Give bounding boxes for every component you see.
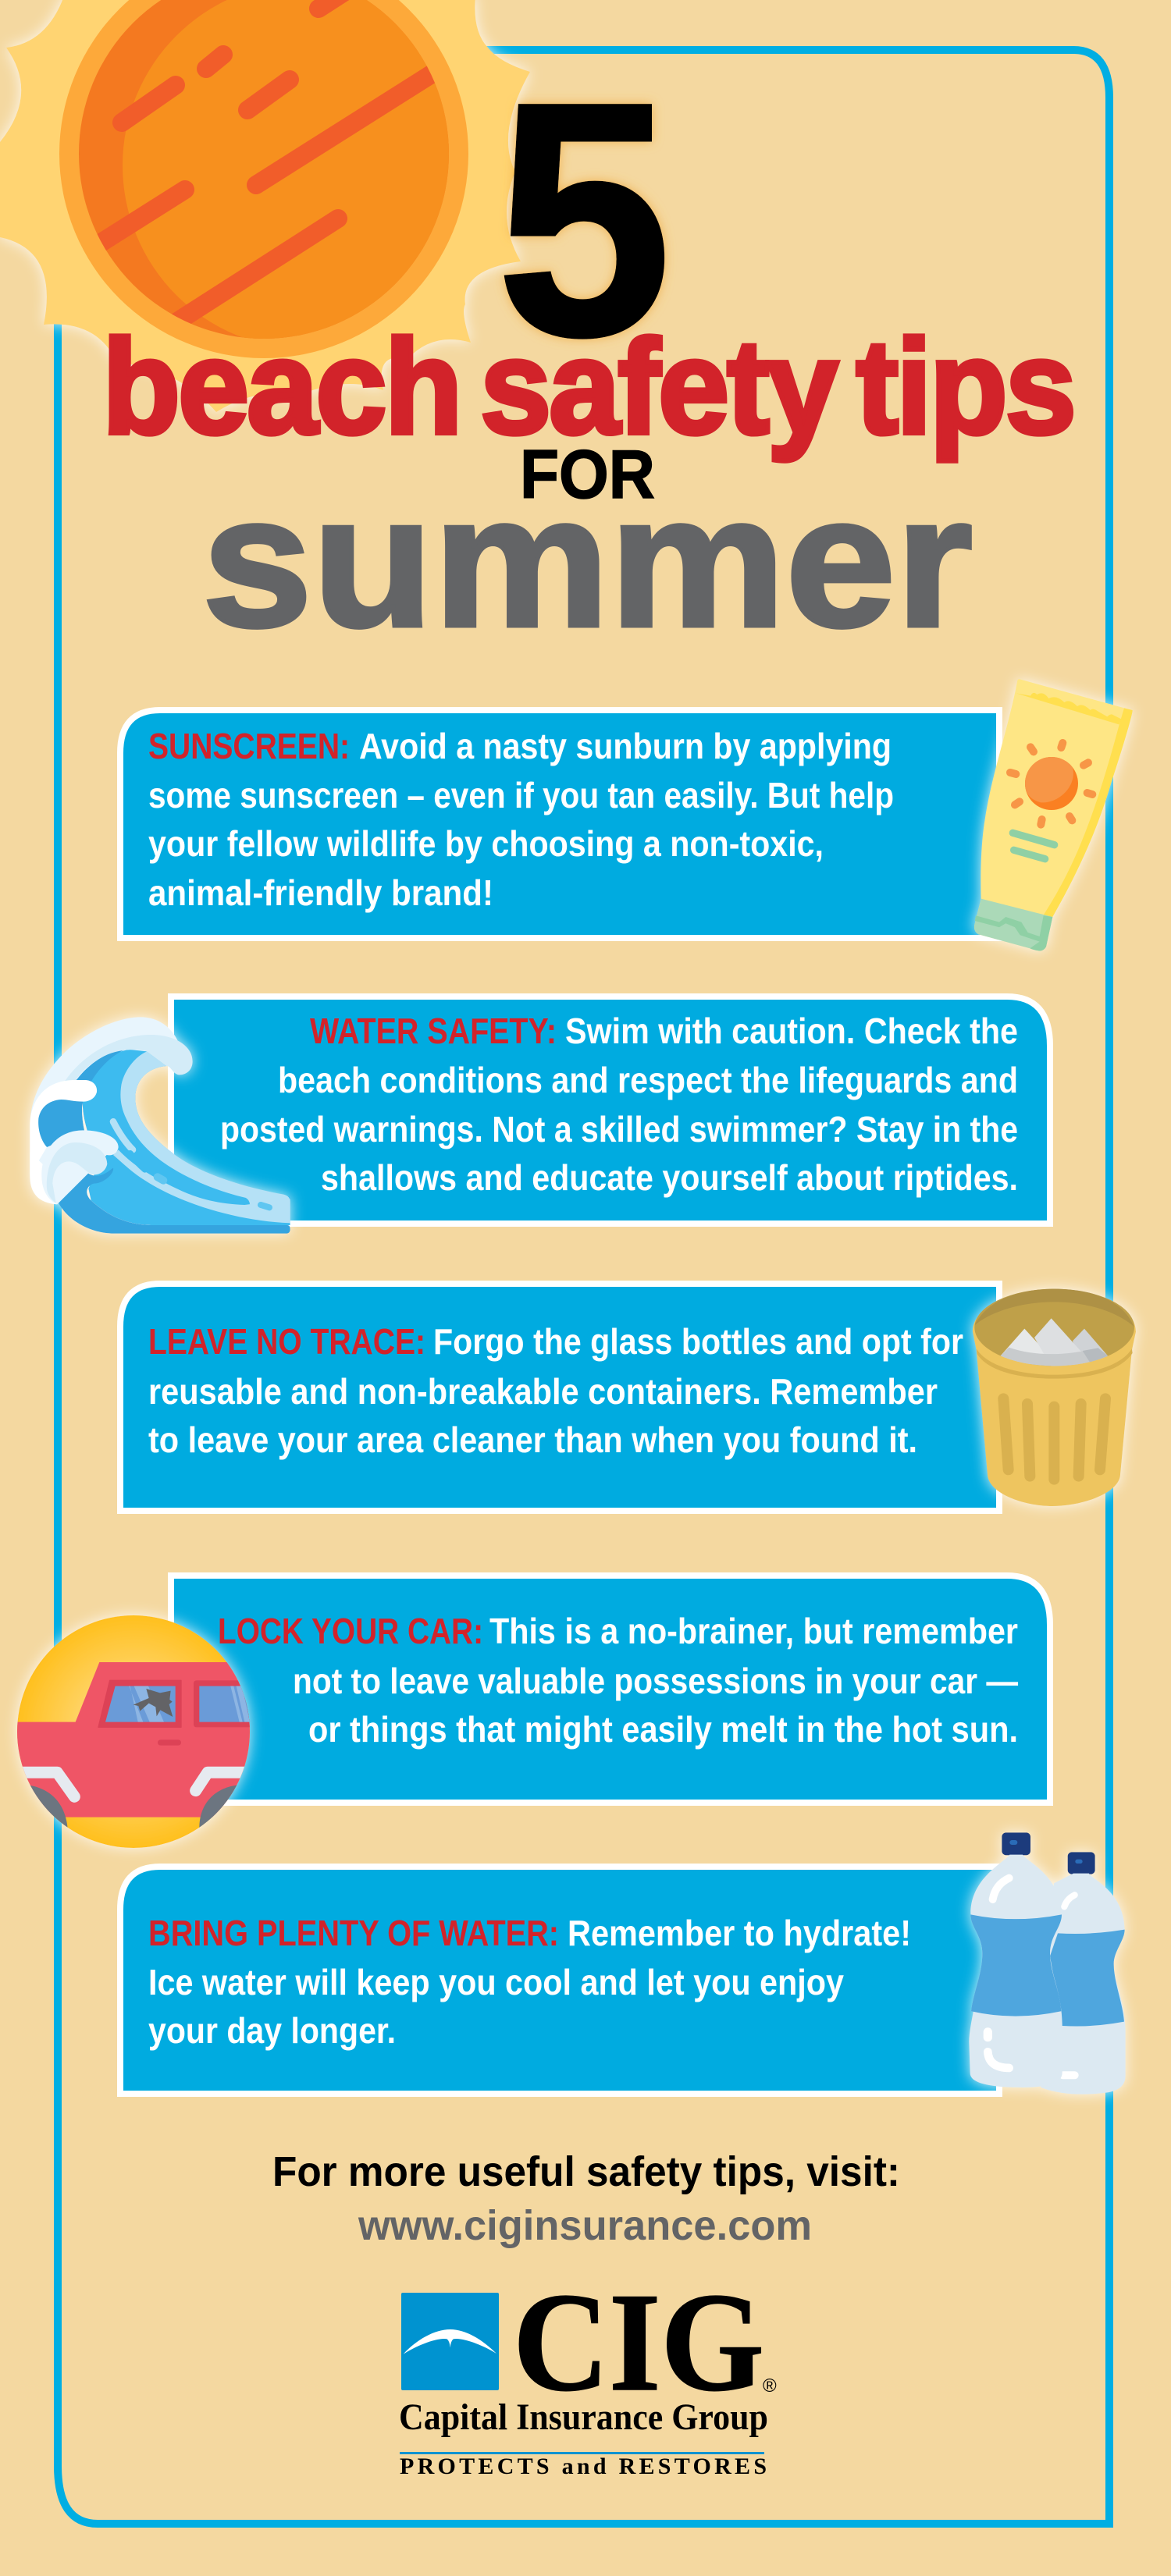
panel text: BRING PLENTY OF WATER:	[148, 1913, 559, 1953]
title: FOR: FOR	[520, 435, 655, 513]
company name: Capital Insurance Group	[399, 2397, 768, 2438]
panel text: Remember to hydrate!	[568, 1913, 911, 1953]
panel text	[148, 1913, 911, 2051]
panel background	[120, 1867, 999, 2094]
title: number 5: 5	[497, 34, 671, 405]
panel text: Ice water will keep you cool and let you enjoy	[148, 1962, 844, 2002]
tagline: PROTECTS and RESTORES	[400, 2453, 767, 2479]
panel text: LEAVE NO TRACE:	[148, 1321, 425, 1362]
logo mark	[401, 2293, 499, 2390]
panel text	[148, 726, 894, 913]
icon: sunscreen tube	[974, 679, 1133, 950]
panel text: beach conditions and respect the lifeguards and	[278, 1060, 1018, 1100]
panel text: Avoid a nasty sunburn by applying	[359, 726, 892, 766]
panel text: your day longer.	[148, 2010, 396, 2051]
panel text: not to leave valuable possessions in your car —	[293, 1661, 1018, 1701]
title: summer: summer	[202, 457, 973, 666]
sun disc	[79, 0, 449, 339]
logo wordmark: CIG	[513, 2265, 764, 2421]
sun halo	[0, 0, 530, 412]
panel text: animal-friendly brand!	[148, 872, 493, 913]
panel text	[293, 1611, 1018, 1750]
sun outer ring	[59, 0, 468, 358]
panel text: WATER SAFETY:	[310, 1011, 557, 1051]
panel: lock your car	[171, 1576, 1050, 1803]
panel background	[171, 1576, 1050, 1803]
icon: water bottles	[969, 1832, 1126, 2095]
panel background	[120, 1284, 999, 1511]
panel: sunscreen	[120, 710, 999, 938]
footer: call to action: For more useful safety tips, visit:	[272, 2148, 900, 2195]
panel text: shallows and educate yourself about riptides.	[321, 1157, 1018, 1198]
panel background	[120, 710, 999, 938]
registered mark: ®	[763, 2375, 777, 2397]
panel text: Swim with caution. Check the	[565, 1011, 1018, 1051]
logo: CIG	[399, 2265, 777, 2479]
title: beach safety tips: beach safety tips	[102, 312, 1074, 462]
icon: wave	[30, 1017, 290, 1234]
panel text: your fellow wildlife by choosing a non-toxic,	[148, 823, 824, 864]
panel text: This is a no-brainer, but remember	[489, 1611, 1018, 1651]
footer: website link: www.ciginsurance.com	[358, 2202, 812, 2249]
panel text: Forgo the glass bottles and opt for	[433, 1321, 963, 1362]
panel text	[220, 1011, 1018, 1198]
back bottle	[1041, 1852, 1126, 2095]
icon: sun	[0, 0, 530, 412]
panel text: reusable and non-breakable containers. Remember	[148, 1371, 938, 1412]
icon: car with broken window	[16, 1615, 255, 1848]
panel text: some sunscreen – even if you tan easily. But help	[148, 775, 894, 815]
icon: trash can	[973, 1289, 1136, 1506]
panel text: to leave your area cleaner than when you found it.	[148, 1419, 917, 1460]
panel text	[148, 1321, 963, 1460]
panel text: or things that might easily melt in the hot sun.	[308, 1709, 1018, 1750]
panel label: lock your car: LOCK YOUR CAR:	[218, 1611, 483, 1651]
panel background	[171, 997, 1050, 1224]
panel: leave no trace	[120, 1284, 999, 1511]
panel: water safety	[171, 997, 1050, 1224]
panel: bring plenty of water	[120, 1867, 999, 2094]
panel text: posted warnings. Not a skilled swimmer? Stay in the	[220, 1109, 1018, 1149]
panel text: SUNSCREEN:	[148, 726, 350, 766]
front bottle	[969, 1832, 1062, 2087]
